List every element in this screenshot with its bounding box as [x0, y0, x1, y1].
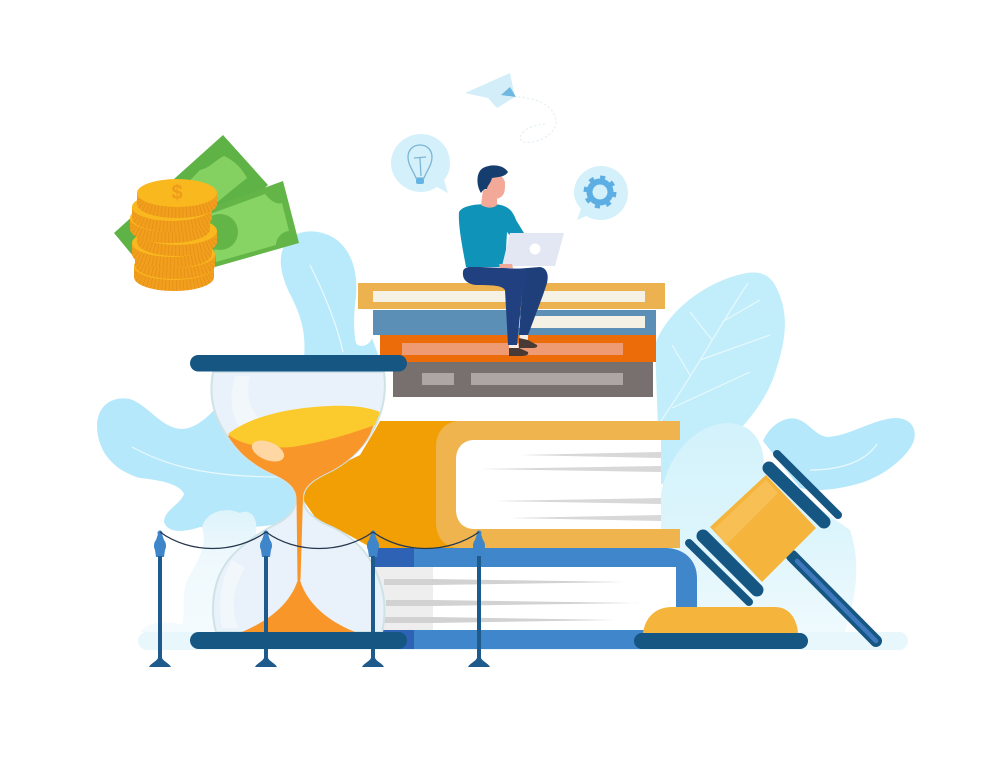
bottom sand [242, 576, 355, 632]
money [114, 135, 299, 291]
white gap behind book stack [385, 396, 655, 422]
background leaf: top left [281, 231, 380, 360]
book: orange [380, 335, 656, 362]
banknote: front [190, 181, 299, 267]
gavel handle [792, 556, 876, 641]
banknote: back [114, 135, 268, 285]
icon: light bulb [408, 145, 432, 184]
books: top stack [358, 283, 665, 397]
gavel head [689, 454, 838, 602]
socks [509, 334, 528, 349]
background leaf: far right [763, 418, 915, 490]
book: large yellow [303, 421, 680, 548]
background shape: pale leaf behind gavel [660, 423, 856, 632]
book: grey [393, 362, 653, 397]
book: slate blue [373, 310, 656, 335]
rope [160, 532, 479, 548]
top bar [190, 355, 407, 372]
man with laptop [459, 165, 564, 356]
book: yellow [358, 283, 665, 309]
background cloud: lower left [140, 510, 262, 632]
hand [499, 264, 513, 268]
head [486, 174, 505, 199]
shoes [509, 338, 537, 356]
illustration [97, 73, 915, 667]
sand highlight [249, 436, 287, 466]
speech bubble: light bulb [391, 134, 450, 193]
book: large blue [375, 548, 697, 649]
torso [459, 204, 524, 267]
back leg [510, 267, 548, 335]
laptop [502, 233, 564, 266]
stanchions with rope [149, 530, 490, 667]
sand surface [228, 406, 380, 447]
dashed flight path [518, 97, 556, 143]
hair [477, 165, 508, 193]
hourglass [190, 355, 407, 632]
speech bubble: gear [574, 166, 628, 220]
top sand [228, 409, 379, 580]
hourglass bottom bar [190, 632, 407, 649]
dollar sign: $ [171, 182, 183, 204]
gavel [634, 454, 876, 649]
glass bulbs [211, 372, 385, 632]
front leg [463, 267, 527, 345]
glass highlight [220, 376, 262, 628]
gavel base [634, 607, 808, 649]
coin stack [130, 179, 217, 291]
background leaf: right [655, 272, 785, 485]
paper plane [465, 73, 556, 143]
background leaf: left [97, 398, 300, 531]
icon: gear [586, 178, 614, 206]
ground band [138, 632, 908, 650]
neck [481, 190, 497, 208]
